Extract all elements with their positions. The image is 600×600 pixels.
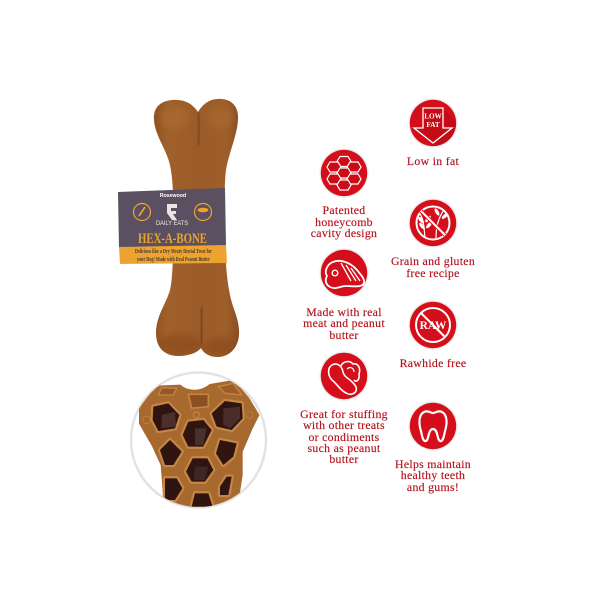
packaging sleeve: your Dog! Made with Real Peanut Butter [137, 257, 210, 263]
product photo: bone treat [118, 99, 240, 357]
sleeve logo [156, 193, 189, 227]
label: grain free: Grain and gluten [391, 254, 475, 268]
packaging sleeve [118, 188, 227, 264]
benefit: healthy teeth [395, 401, 471, 494]
benefit: grain free [391, 198, 475, 280]
icon: honeycomb [319, 148, 369, 198]
benefit: grain free: free recipe [406, 266, 460, 280]
label: stuffing: Great for stuffing [300, 407, 388, 421]
bone body [154, 99, 240, 357]
label: honeycomb: Patented [322, 203, 366, 217]
benefit: real meat: meat and peanut [303, 316, 385, 330]
sleeve tagline: Delicious like a Dry Meaty Dental Treat for [135, 249, 212, 255]
icon: crossed-out raw: RAW [420, 320, 447, 332]
sleeve logo: Rosewood [160, 193, 186, 199]
benefit: honeycomb [311, 148, 377, 240]
icon: low fat arrow [408, 98, 458, 148]
benefit: healthy teeth: and gums! [407, 480, 459, 494]
inset photo: honeycomb end of the bone [131, 372, 266, 508]
label: real meat: Made with real [306, 305, 382, 319]
benefit: stuffing [300, 351, 388, 466]
benefit: stuffing: or condiments [308, 430, 380, 444]
benefit: honeycomb: cavity design [311, 226, 377, 240]
icon: crossed-out grain [408, 198, 458, 248]
icon: peanut [319, 351, 369, 401]
benefit: stuffing: such as peanut [308, 441, 381, 455]
benefit: honeycomb: honeycomb [315, 215, 373, 229]
icon: low fat arrow: FAT [426, 121, 440, 129]
sleeve title: HEX-A-BONE [138, 231, 207, 247]
icon: steak [319, 248, 369, 298]
label: rawhide free: Rawhide free [400, 356, 466, 370]
label: healthy teeth: Helps maintain [395, 457, 471, 471]
benefit: real meat: butter [329, 328, 359, 342]
benefit: rawhide free [400, 300, 466, 370]
benefit: real meat [303, 248, 385, 342]
benefit: stuffing: butter [329, 452, 359, 466]
benefit: low in fat [407, 98, 459, 168]
label: low in fat: Low in fat [407, 154, 459, 168]
icon: tooth [408, 401, 458, 451]
sleeve logo: DAILY EATS [156, 220, 189, 227]
sleeve badges [134, 204, 212, 220]
benefit: stuffing: with other treats [303, 418, 385, 432]
benefit: healthy teeth: healthy teeth [401, 468, 465, 482]
icon: low fat arrow: LOW [424, 112, 443, 120]
